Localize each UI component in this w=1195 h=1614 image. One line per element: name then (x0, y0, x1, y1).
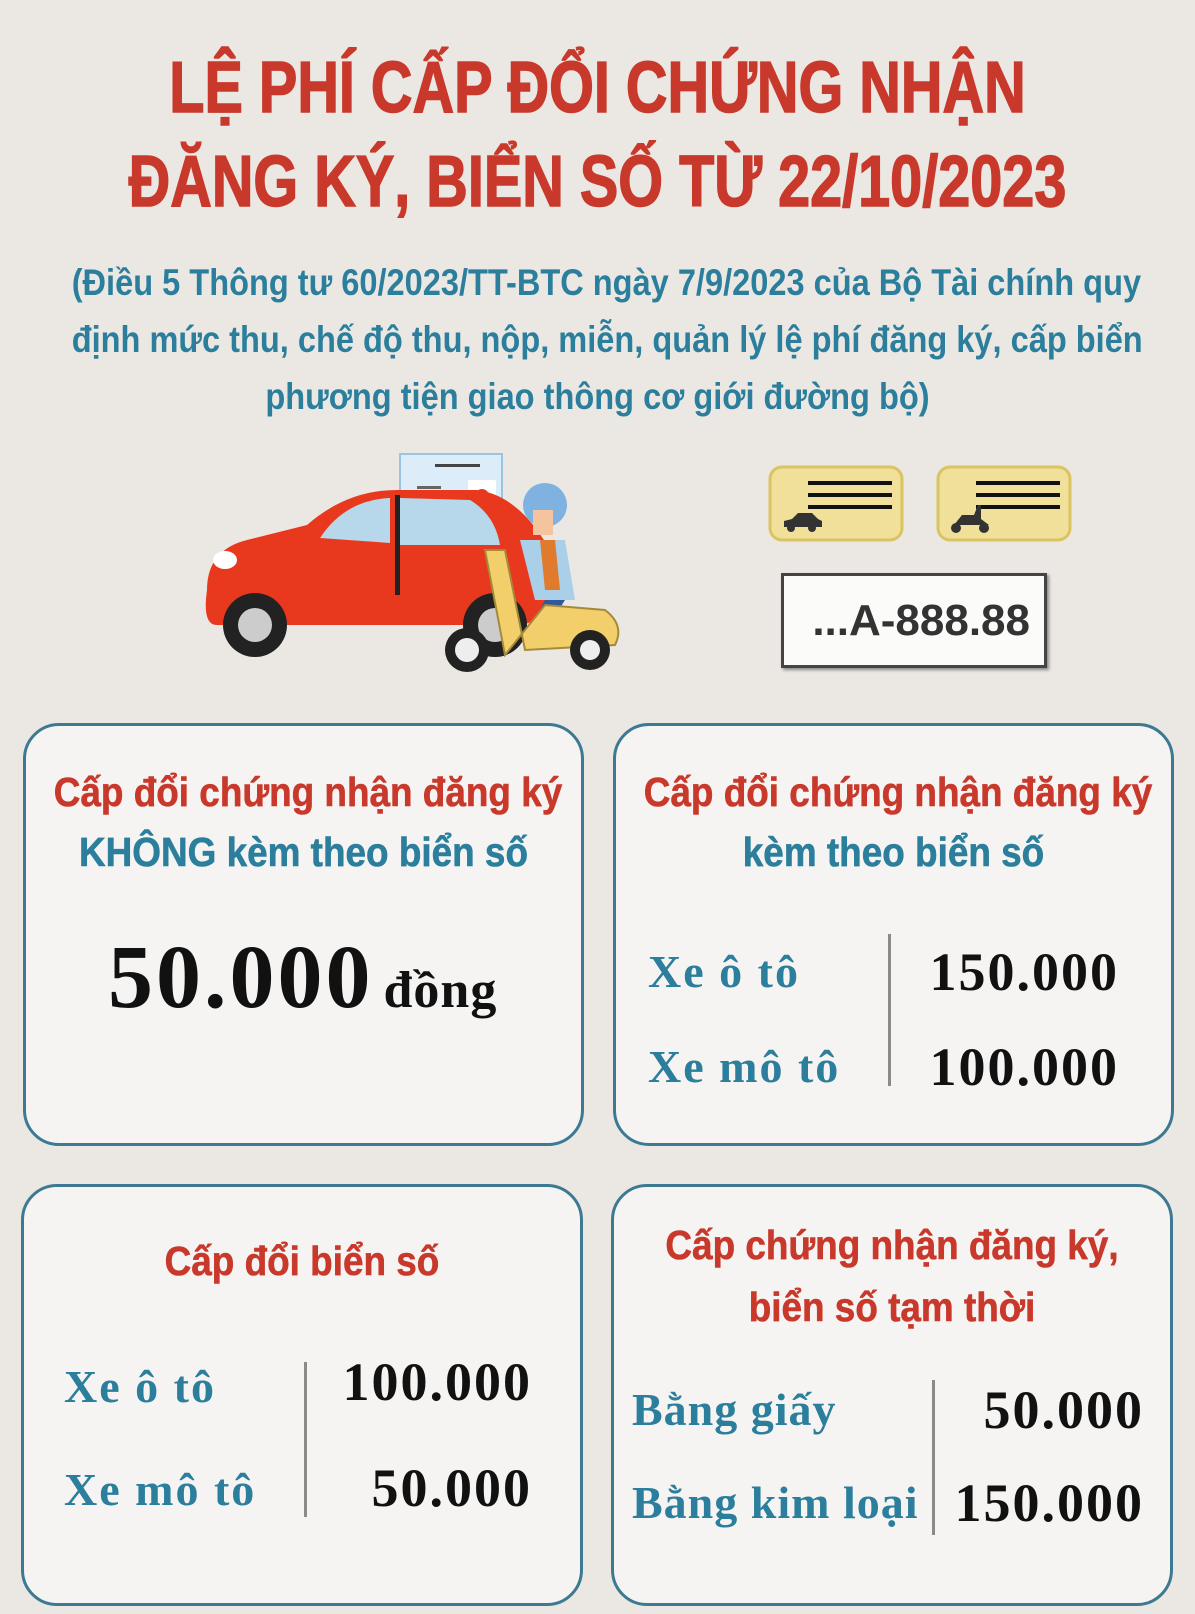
panel title: Cấp đổi chứng nhận đăng ký (644, 769, 1152, 815)
panel title: kèm theo biển số (743, 829, 1044, 875)
panel title (644, 769, 1152, 875)
illustration: car and scooter with registration card (206, 453, 620, 672)
price table: Bằng kim loại (632, 1477, 919, 1528)
price table: Xe ô tô (64, 1361, 216, 1412)
price table: 150.000 (930, 942, 1119, 1002)
panel title (665, 1222, 1119, 1330)
panel: with plate (613, 723, 1174, 1146)
price table: 100.000 (930, 1037, 1119, 1097)
price table: 150.000 (954, 1473, 1144, 1533)
panel title: Cấp đổi biển số (165, 1238, 439, 1284)
price: 50.000 đồng (108, 928, 497, 1027)
subtitle: (Điều 5 Thông tư 60/2023/TT-BTC ngày 7/9/2023 của Bộ Tài chính quy (72, 262, 1141, 303)
price table: Xe mô tô (64, 1464, 256, 1515)
price table (632, 1380, 1144, 1535)
panel: temporary (611, 1184, 1173, 1606)
price table: 50.000 (372, 1458, 532, 1518)
price table: Bằng giấy (632, 1384, 837, 1435)
subtitle: định mức thu, chế độ thu, nộp, miễn, quản lý lệ phí đăng ký, cấp biển (72, 319, 1143, 360)
panel title: Cấp chứng nhận đăng ký, (665, 1222, 1119, 1268)
subtitle (72, 262, 1143, 417)
license plate (781, 573, 1047, 668)
panel title: Cấp đổi chứng nhận đăng ký (54, 769, 562, 815)
icon: car registration card (768, 466, 904, 542)
price table (64, 1352, 532, 1518)
title: LỆ PHÍ CẤP ĐỔI CHỨNG NHẬN (169, 48, 1026, 128)
panel title: KHÔNG kèm theo biển số (79, 829, 528, 875)
panel title (54, 769, 562, 875)
title (128, 46, 1066, 222)
price table: Xe mô tô (648, 1041, 840, 1092)
license plate: ...A-888.88 (812, 596, 1030, 645)
panel: without plate (23, 723, 584, 1146)
price table: 50.000 (984, 1380, 1144, 1440)
panel title: biển số tạm thời (749, 1284, 1035, 1330)
title: ĐĂNG KÝ, BIỂN SỐ TỪ 22/10/2023 (129, 142, 1066, 222)
price table: Xe ô tô (648, 946, 800, 997)
panel: plate replacement (21, 1184, 583, 1606)
price table: 100.000 (342, 1352, 532, 1412)
icon: motorbike registration card (936, 466, 1072, 542)
subtitle: phương tiện giao thông cơ giới đường bộ) (265, 376, 930, 417)
price table (648, 934, 1119, 1097)
